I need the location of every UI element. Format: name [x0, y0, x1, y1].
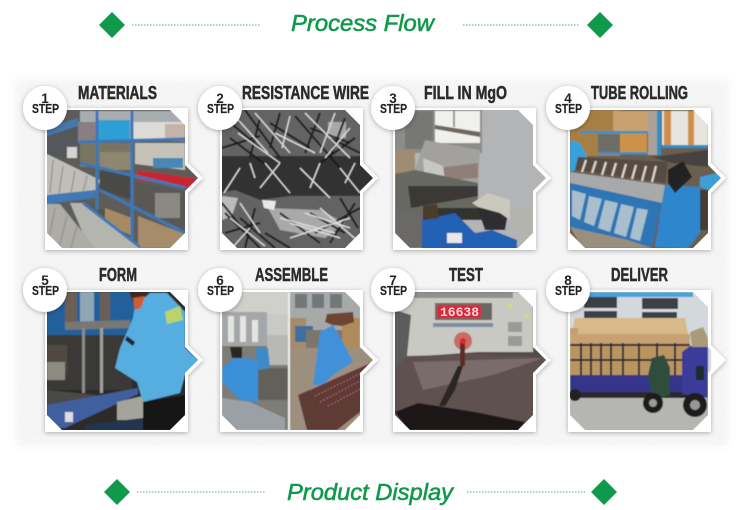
- meter reading: 16638: [440, 305, 479, 320]
- photo frame: [393, 108, 553, 250]
- heading: TUBE ROLLING: [591, 83, 688, 103]
- panel: step 6 assemble: STEP: [207, 284, 234, 298]
- panel: step 7 test: [371, 265, 553, 432]
- mottled panel background: [16, 80, 728, 445]
- panel: step 2 resistance wire: STEP: [207, 102, 234, 116]
- heading: FORM: [99, 265, 137, 285]
- heading text: Process Flow: [291, 10, 435, 36]
- panel: step 4 tube rolling: STEP: [555, 102, 582, 116]
- panel: step 8 deliver: STEP: [555, 284, 582, 298]
- step label: 4: [564, 91, 572, 106]
- panel: step 5 form: STEP: [32, 284, 59, 298]
- step badge: [198, 86, 242, 130]
- icon: left diamond: [104, 479, 130, 505]
- step badge: [198, 268, 242, 312]
- step label: 3: [389, 91, 397, 106]
- heading: MATERIALS: [78, 83, 157, 103]
- footer: Product Display: [104, 479, 617, 505]
- panel: step 3 fill in MgO: STEP: [380, 102, 407, 116]
- icon: left diamond: [99, 12, 125, 38]
- heading: TEST: [449, 265, 483, 285]
- heading: DELIVER: [611, 265, 668, 285]
- heading: FILL IN MgO: [424, 83, 507, 103]
- step badge: [371, 268, 415, 312]
- step label: 2: [216, 91, 224, 106]
- panel: step 3 fill in MgO: [371, 83, 553, 250]
- panel: step 5 form: [23, 265, 205, 432]
- heading text: Product Display: [287, 479, 455, 505]
- photo frame: [45, 108, 205, 250]
- photo frame: [568, 108, 728, 250]
- step badge: [546, 268, 590, 312]
- step label: 7: [389, 273, 397, 288]
- step badge: [371, 86, 415, 130]
- step label: 6: [216, 273, 224, 288]
- photo frame: [220, 108, 380, 250]
- heading: RESISTANCE WIRE: [242, 83, 369, 103]
- heading: ASSEMBLE: [255, 265, 328, 285]
- panel: step 4 tube rolling: [546, 83, 728, 250]
- panel: step 2 resistance wire: [198, 83, 380, 250]
- step badge: [23, 86, 67, 130]
- photo frame: [220, 290, 380, 432]
- header: Process Flow: [99, 10, 613, 38]
- panel: step 8 deliver: [546, 265, 726, 432]
- icon: right diamond: [587, 12, 613, 38]
- panel: step 7 test: STEP: [380, 284, 407, 298]
- step label: 1: [41, 91, 49, 106]
- icon: right diamond: [591, 479, 617, 505]
- step badge: [546, 86, 590, 130]
- step label: 8: [564, 273, 572, 288]
- panel: step 1 materials: STEP: [32, 102, 59, 116]
- panel: step 6 assemble: [198, 265, 380, 432]
- step label: 5: [41, 273, 49, 288]
- step badge: [23, 268, 67, 312]
- photo frame: [45, 290, 205, 432]
- photo frame: [393, 290, 553, 432]
- panel: step 1 materials: [23, 83, 205, 250]
- photo frame: [568, 290, 726, 432]
